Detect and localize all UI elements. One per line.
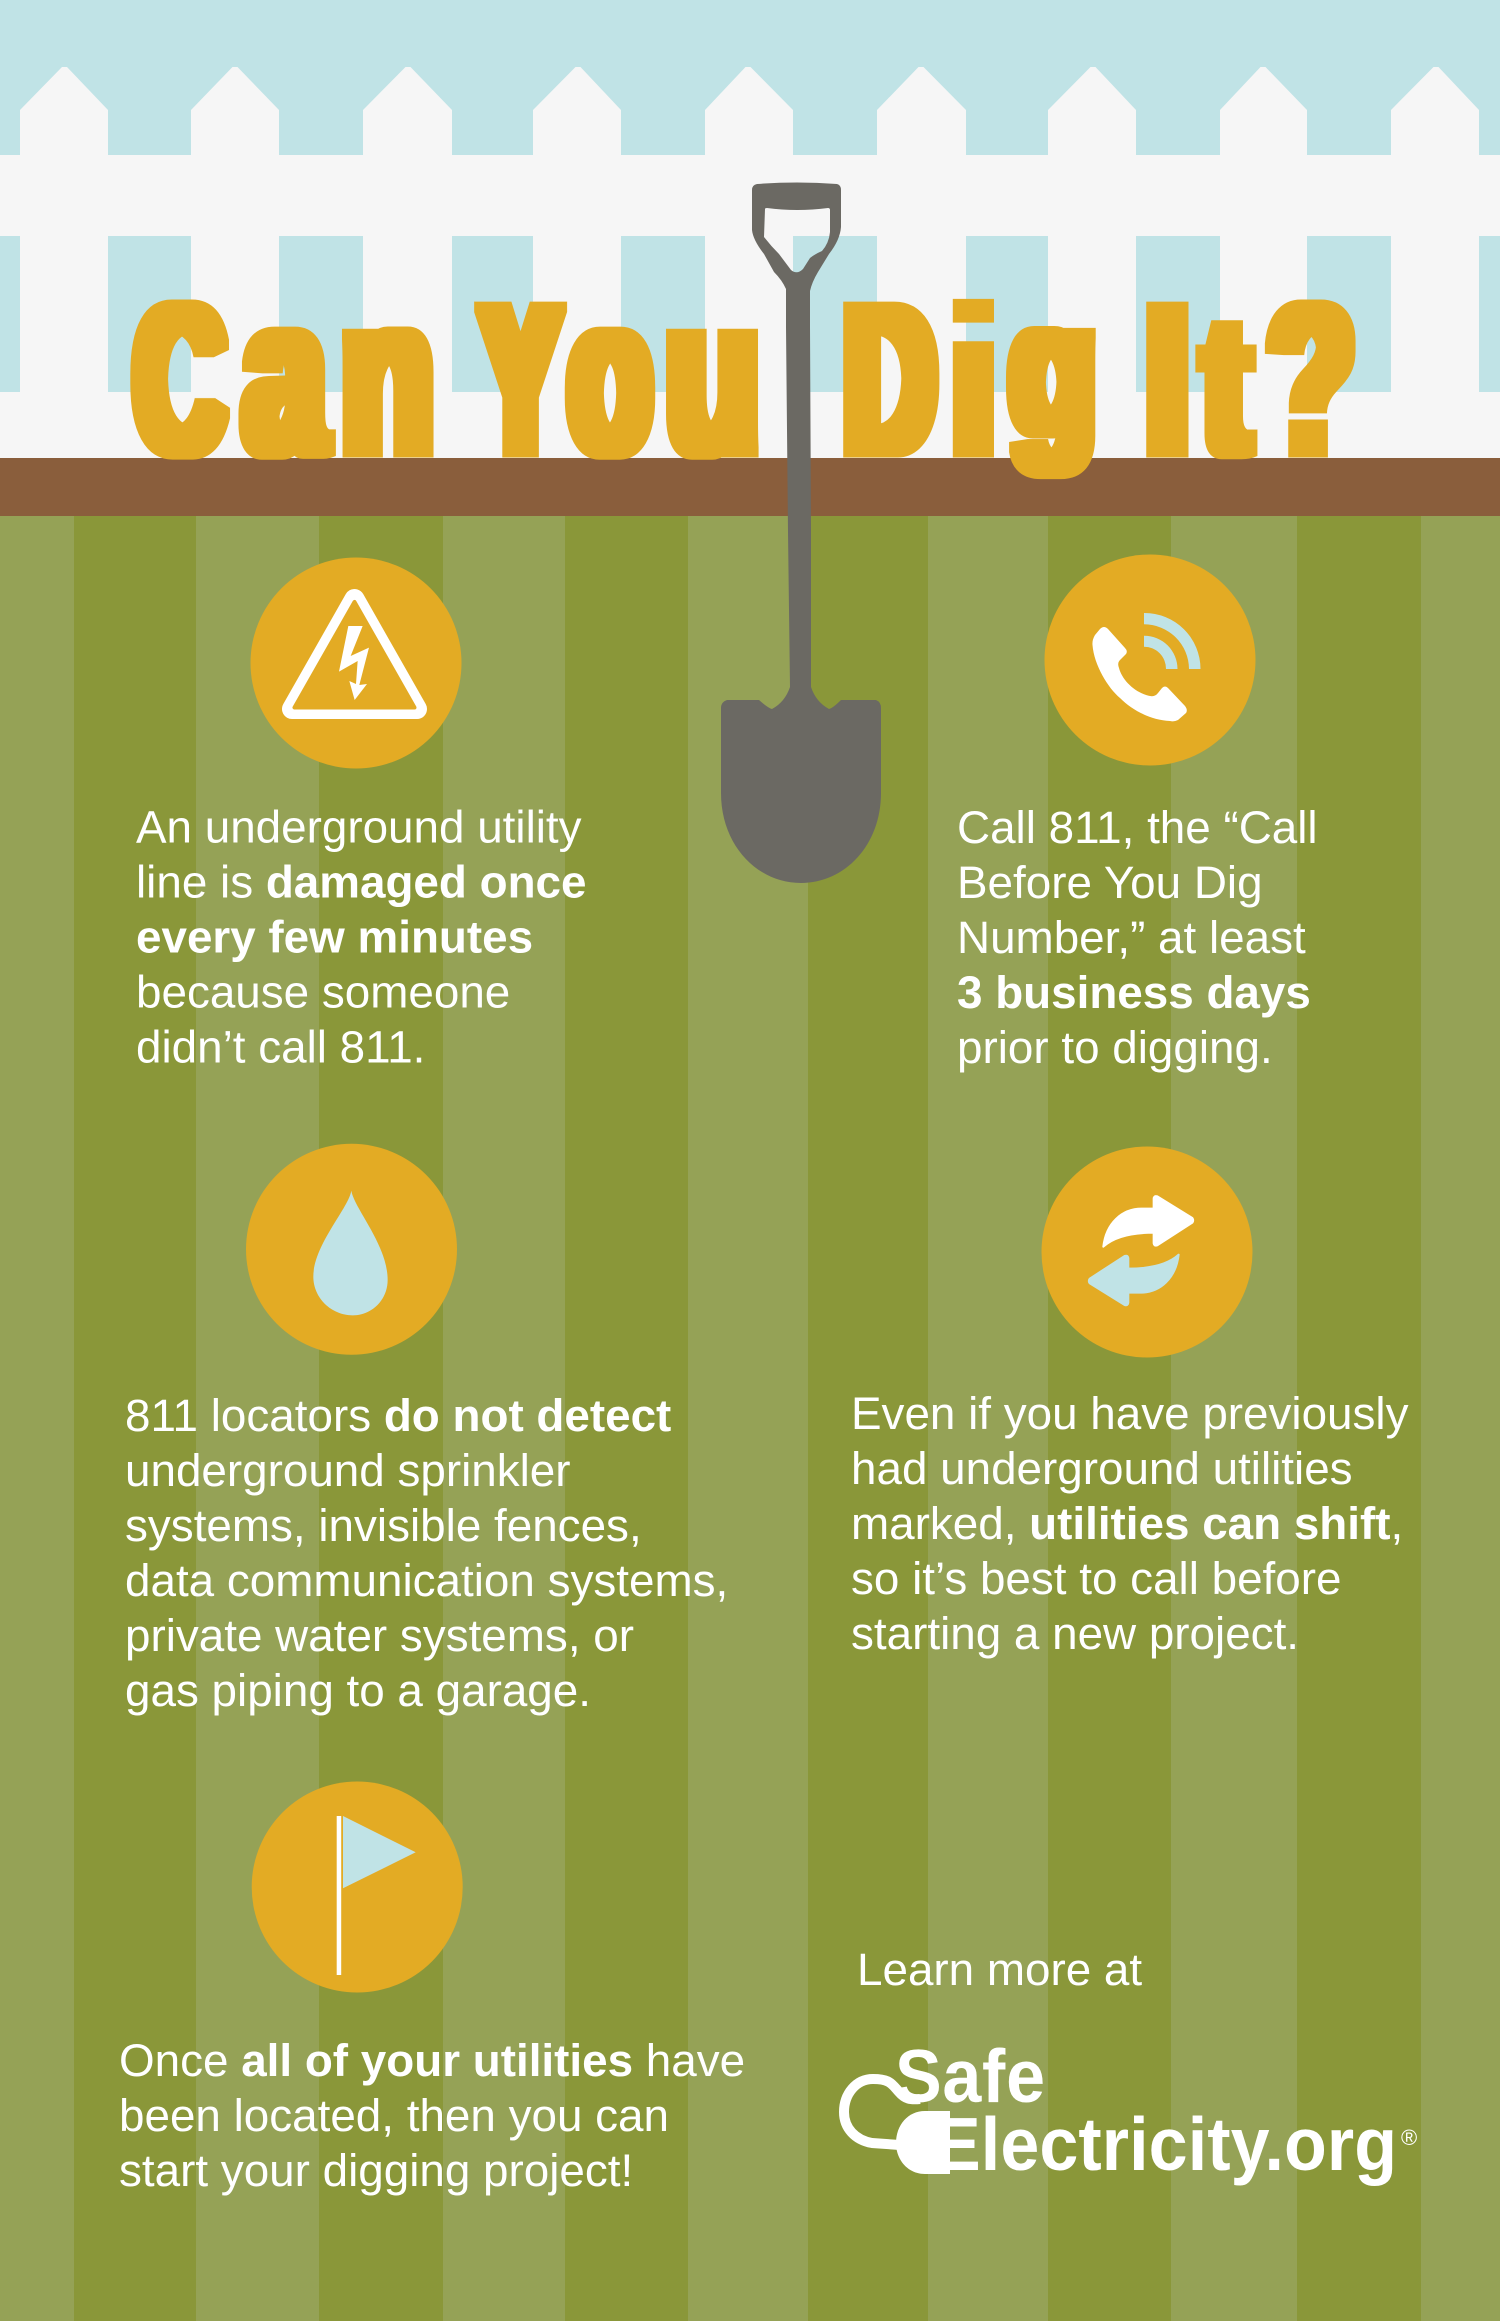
icon: water drop — [246, 1144, 457, 1355]
text: utilities can shift: starting a new project. — [851, 1608, 1299, 1659]
striped green lawn — [0, 516, 1500, 2321]
title: Can You Dig It?: o — [570, 250, 650, 501]
title: Can You Dig It?: Y — [482, 261, 559, 498]
title: Can You Dig It?: n — [342, 251, 433, 501]
text: start digging: been located, then you can — [119, 2090, 669, 2141]
text: utility line damage: An underground utility — [136, 802, 582, 852]
text: utilities can shift: had underground utilities — [851, 1443, 1353, 1494]
title: Can You Dig It?: i — [952, 261, 995, 503]
title: Can You Dig It? — [135, 249, 1354, 503]
text: utility line damage: line is damaged once — [136, 856, 586, 908]
icon: telephone with signal arcs — [1044, 554, 1256, 766]
logo: SafeElectricity.org: Electricity.org — [934, 2103, 1397, 2187]
title: Can You Dig It?: t — [1204, 276, 1249, 494]
title: Can You Dig It?: g — [1010, 262, 1095, 475]
text: utility line damage: didn’t call 811. — [136, 1022, 425, 1072]
title: Can You Dig It?: u — [667, 249, 759, 501]
text: learn more at: Learn more at — [857, 1944, 1142, 1995]
text: locators do not detect: private water systems, or — [125, 1610, 634, 1661]
text: locators do not detect: gas piping to a garage. — [125, 1665, 591, 1716]
text: locators do not detect: underground sprinkler — [125, 1445, 571, 1496]
text: utilities can shift: so it’s best to call before — [851, 1553, 1341, 1604]
text: locators do not detect: 811 locators do not detect — [125, 1390, 671, 1441]
sky background — [0, 0, 1500, 460]
title: Can You Dig It?: a — [244, 251, 326, 501]
text: call 811: prior to digging. — [957, 1022, 1273, 1073]
text: start digging: start your digging project! — [119, 2145, 633, 2196]
title: Can You Dig It?: D — [845, 261, 935, 498]
title: Can You Dig It?: I — [1146, 262, 1189, 498]
icon: marker flag — [252, 1782, 463, 1992]
logo: SafeElectricity.org: ® — [1401, 2125, 1417, 2150]
title: Can You Dig It?: C — [135, 260, 223, 498]
text: locators do not detect: systems, invisible fences, — [125, 1500, 642, 1551]
white picket fence — [0, 67, 1500, 460]
text: utility line damage: because someone — [136, 966, 510, 1018]
brown soil band — [0, 458, 1500, 516]
text: call 811: Before You Dig — [957, 857, 1263, 908]
icon: warning triangle with lightning bolt — [250, 558, 462, 768]
shovel — [721, 182, 881, 883]
title: Can You Dig It?: ? — [1268, 262, 1354, 499]
logo: SafeElectricity.org: Safe — [895, 2035, 1045, 2119]
text: call 811: Call 811, the “Call — [957, 802, 1318, 853]
text: call 811: 3 business days — [957, 967, 1311, 1018]
text: locators do not detect: data communication systems, — [125, 1555, 728, 1606]
icon: circular arrows — [1042, 1146, 1252, 1358]
text: utility line damage: every few minutes — [136, 912, 533, 962]
text: start digging: Once all of your utilities have — [119, 2035, 745, 2086]
text: call 811: Number,” at least — [957, 912, 1306, 963]
text: utilities can shift: marked, utilities can shift, — [851, 1498, 1403, 1549]
text: utilities can shift: Even if you have previously — [851, 1388, 1409, 1439]
logo: SafeElectricity.org — [844, 2035, 1417, 2187]
